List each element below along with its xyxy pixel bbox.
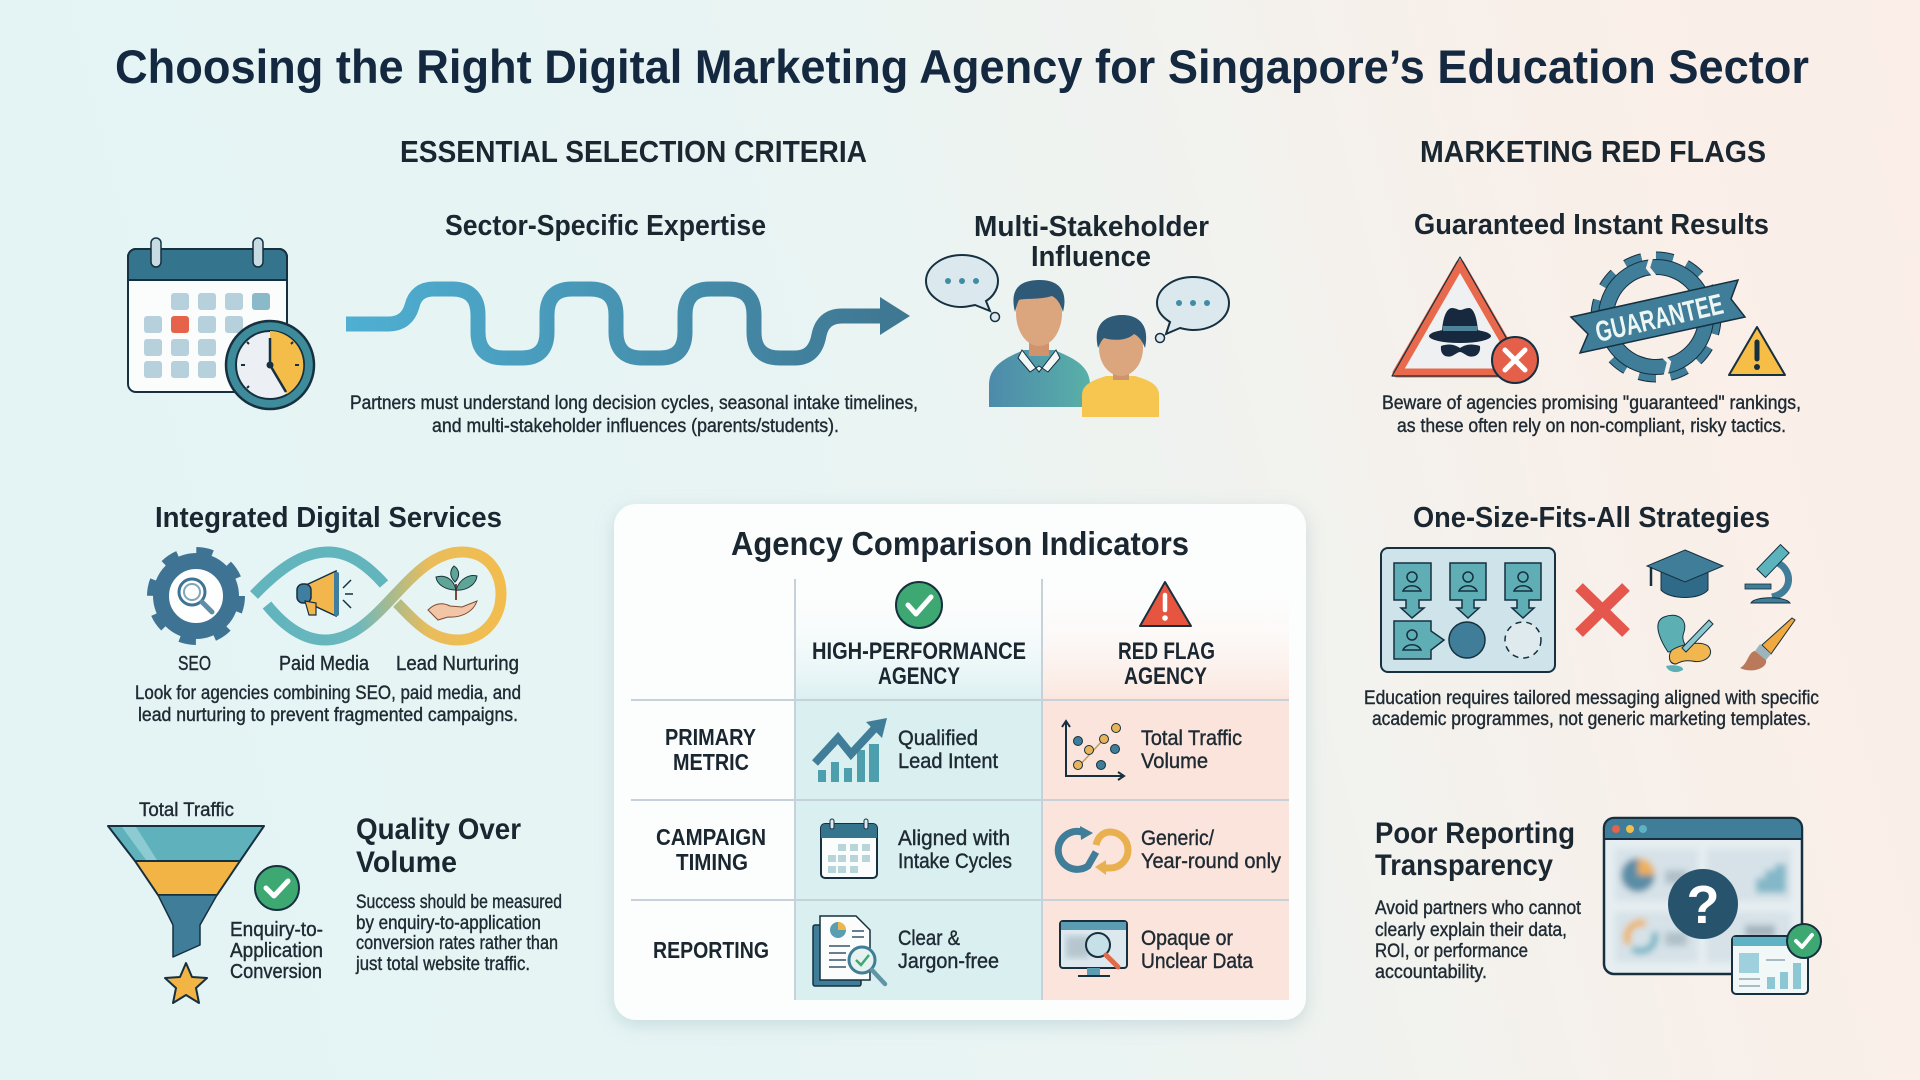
icon: hand with plant xyxy=(428,566,477,620)
icon: microscope xyxy=(1745,545,1790,603)
text: qualified lead intent: Lead Intent xyxy=(898,750,998,773)
icon: small calendar xyxy=(821,819,877,878)
label: lead nurturing: Lead Nurturing xyxy=(396,653,519,675)
icon: red cross xyxy=(1579,587,1626,633)
text: avoid partners xyxy=(1375,898,1582,983)
label: enquiry-to-application conversion xyxy=(230,919,323,983)
icon: seo gear xyxy=(152,552,240,640)
heading: poor reporting transparency: Transparency xyxy=(1375,849,1553,882)
heading: agency comparison indicators: Agency Comparison Indicators xyxy=(731,525,1189,562)
text: clear and jargon-free: Clear & xyxy=(898,927,960,950)
icon: megaphone xyxy=(297,571,353,616)
card background xyxy=(614,504,1306,1020)
column heading: high-performance agency: AGENCY xyxy=(878,663,960,690)
icon: palette and pen xyxy=(1658,615,1713,672)
text: look for agencies: lead nurturing to prevent fragmented campaigns. xyxy=(138,705,518,726)
heading: multi-stakeholder influence: Multi-Stakeholder xyxy=(974,211,1209,243)
text: aligned with intake cycles xyxy=(898,827,1012,873)
text: beware of agencies: Beware of agencies promising "guaranteed" rankings, xyxy=(1382,393,1801,414)
icon: blurred dashboard window xyxy=(1604,818,1802,974)
row label: primary metric: METRIC xyxy=(673,749,749,775)
label: seo: SEO xyxy=(178,653,211,675)
text: beware of agencies xyxy=(1382,393,1801,437)
panel: guaranteed instant results xyxy=(1382,209,1801,437)
text: total traffic volume: Volume xyxy=(1141,750,1208,773)
label: paid media: Paid Media xyxy=(279,653,370,675)
text: look for agencies: Look for agencies combining SEO, paid media, and xyxy=(135,683,521,704)
label: enquiry-to-application conversion: Conversion xyxy=(230,961,322,983)
heading: poor reporting transparency: Poor Reporting xyxy=(1375,817,1575,850)
text: partners must understand xyxy=(350,393,918,437)
text: success should be measured: conversion rates rather than xyxy=(356,933,558,954)
icon: red warning xyxy=(1140,582,1191,626)
text: beware of agencies: as these often rely on non-compliant, risky tactics. xyxy=(1397,416,1786,437)
label: enquiry-to-application conversion: Enquiry-to- xyxy=(230,919,323,941)
icon: broken guarantee gear xyxy=(1571,248,1745,386)
icon: green check xyxy=(896,582,942,628)
text: education requires: academic programmes, not generic marketing templates. xyxy=(1372,709,1811,730)
icon: repeating cycle xyxy=(1058,826,1128,875)
text: avoid partners: ROI, or performance xyxy=(1375,941,1528,962)
row label: campaign timing: TIMING xyxy=(676,849,748,875)
heading: poor reporting transparency xyxy=(1375,817,1575,882)
text: partners must understand: and multi-stakeholder influences (parents/students). xyxy=(432,416,839,437)
heading: guaranteed instant results: Guaranteed Instant Results xyxy=(1414,209,1769,241)
label: enquiry-to-application conversion: Application xyxy=(230,940,323,962)
icon: green check xyxy=(255,866,299,910)
row label: primary metric xyxy=(665,724,756,775)
label: total traffic: Total Traffic xyxy=(139,800,234,821)
text: qualified lead intent xyxy=(898,727,998,773)
icon: calendar with clock xyxy=(128,238,314,409)
panel: one-size-fits-all strategies xyxy=(1364,502,1819,730)
arrow: winding decision path xyxy=(346,289,910,358)
text: success should be measured xyxy=(355,892,562,975)
panel: multi-stakeholder influence xyxy=(926,211,1229,417)
heading: quality over volume: Quality Over xyxy=(356,813,521,846)
column heading: high-performance agency xyxy=(812,638,1026,690)
text: opaque or unclear data: Opaque or xyxy=(1141,927,1233,950)
panel: integrated digital services xyxy=(135,502,521,726)
heading: integrated digital services: Integrated Digital Services xyxy=(155,502,502,534)
icon: warning triangle with spy xyxy=(1392,257,1538,383)
row label: primary metric: PRIMARY xyxy=(665,724,756,750)
column heading: red flag agency xyxy=(1118,638,1215,690)
text: look for agencies xyxy=(135,683,521,726)
heading: essential selection criteria: ESSENTIAL SELECTION CRITERIA xyxy=(400,134,867,169)
icon: paint brush xyxy=(1740,618,1795,670)
column heading: red flag agency: RED FLAG xyxy=(1118,638,1215,665)
row label: reporting: REPORTING xyxy=(653,937,769,963)
panel: agency comparison indicators xyxy=(614,504,1306,1020)
text: clear and jargon-free xyxy=(898,927,999,973)
text: education requires: Education requires tailored messaging aligned with specific xyxy=(1364,688,1819,709)
heading: quality over volume: Volume xyxy=(356,846,457,879)
icon: report with magnifier xyxy=(813,916,885,986)
icon: parent and student xyxy=(989,280,1159,417)
icon: broken guarantee gear: GUARANTEE xyxy=(1592,289,1726,349)
text: total traffic volume xyxy=(1141,727,1242,773)
text: generic year-round only: Generic/ xyxy=(1141,827,1214,850)
row label: campaign timing: CAMPAIGN xyxy=(656,824,766,850)
heading: multi-stakeholder influence: Influence xyxy=(1031,241,1151,273)
panel: sector-specific expertise xyxy=(128,210,918,437)
heading: marketing red flags: MARKETING RED FLAGS xyxy=(1420,134,1766,169)
icon: conversion funnel xyxy=(108,826,264,957)
text: aligned with intake cycles: Aligned with xyxy=(898,827,1010,850)
text: avoid partners: clearly explain their data, xyxy=(1375,920,1567,941)
heading: quality over volume xyxy=(356,813,521,879)
text: opaque or unclear data: Unclear Data xyxy=(1141,950,1253,973)
panel: quality over volume xyxy=(108,800,562,1003)
icon: speech bubbles xyxy=(926,255,1229,342)
text: opaque or unclear data xyxy=(1141,927,1253,973)
icon: graduation cap xyxy=(1647,550,1723,598)
text: partners must understand: Partners must understand long decision cycles, seasonal intake timelines, xyxy=(350,393,918,414)
text: success should be measured: by enquiry-to-application xyxy=(356,913,541,934)
table column fills xyxy=(631,579,1289,1000)
text: total traffic volume: Total Traffic xyxy=(1141,727,1242,750)
heading: multi-stakeholder influence xyxy=(974,211,1209,273)
icon: rising chart xyxy=(815,718,887,782)
text: aligned with intake cycles: Intake Cycles xyxy=(898,850,1012,873)
icon: yellow warning triangle xyxy=(1729,327,1785,375)
heading: sector-specific expertise: Sector-Specific Expertise xyxy=(445,210,766,242)
icon: monitor with magnifier xyxy=(1060,921,1127,976)
title: Choosing the Right Digital Marketing Agency for Singapore’s Education Sector xyxy=(115,40,1809,93)
heading: one-size-fits-all strategies: One-Size-Fits-All Strategies xyxy=(1413,502,1770,534)
column heading: high-performance agency: HIGH-PERFORMANCE xyxy=(812,638,1026,665)
icon: infinity ribbon xyxy=(254,552,501,640)
panel: poor reporting transparency xyxy=(1375,817,1821,994)
text: clear and jargon-free: Jargon-free xyxy=(898,950,999,973)
text: education requires xyxy=(1364,688,1819,730)
icon: small report window with check xyxy=(1732,924,1821,994)
text: avoid partners: Avoid partners who cannot xyxy=(1375,898,1582,919)
text: qualified lead intent: Qualified xyxy=(898,727,978,750)
icon: scatter plot xyxy=(1062,721,1124,780)
icon: star xyxy=(165,963,207,1003)
text: success should be measured: Success should be measured xyxy=(356,892,562,913)
row label: campaign timing xyxy=(656,824,766,875)
icon: template grid xyxy=(1381,548,1555,672)
text: success should be measured: just total website traffic. xyxy=(355,954,530,975)
text: generic year-round only xyxy=(1141,827,1281,873)
column heading: red flag agency: AGENCY xyxy=(1124,663,1207,690)
text: generic year-round only: Year-round only xyxy=(1141,850,1281,873)
icon: blurred dashboard window: ? xyxy=(1686,875,1720,935)
text: avoid partners: accountability. xyxy=(1375,962,1487,983)
